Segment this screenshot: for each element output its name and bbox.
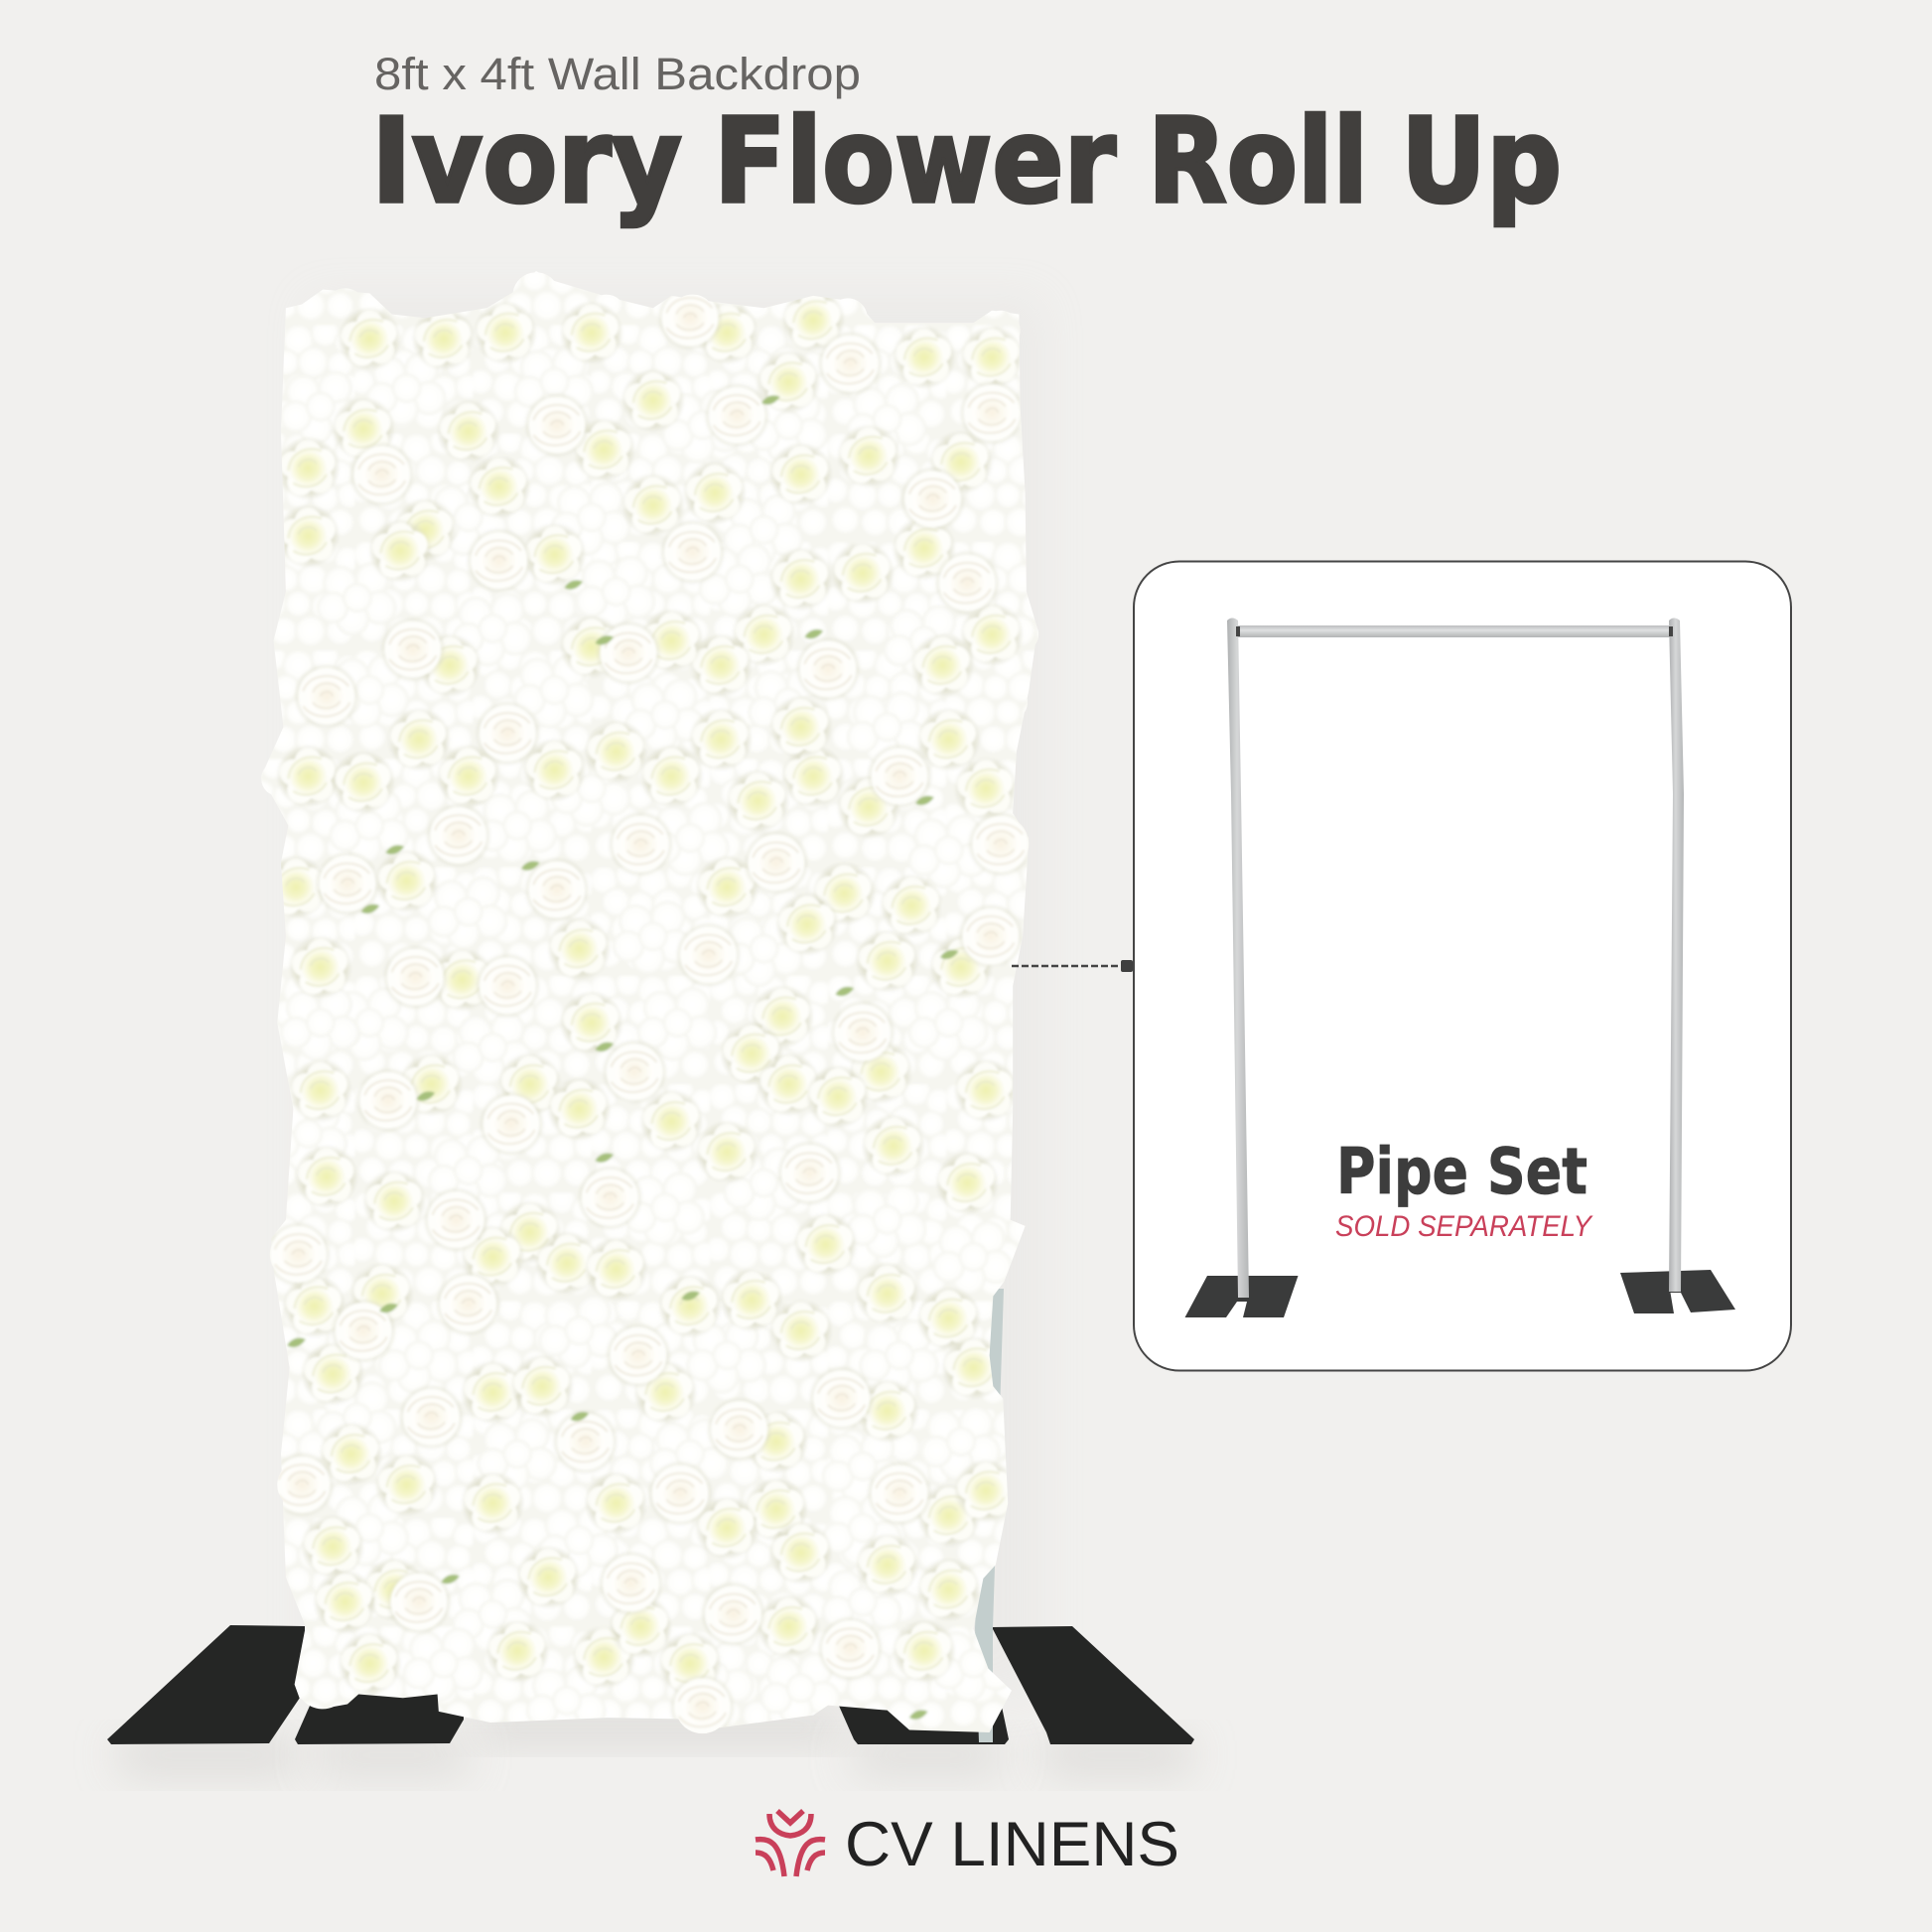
plate: far right bbox=[992, 1626, 1194, 1744]
plate: inner left bbox=[295, 1688, 464, 1744]
icon: pipe and base frame bbox=[1185, 618, 1735, 1317]
heading: title: Ivory bbox=[371, 92, 682, 229]
heading: title: Up bbox=[1401, 92, 1562, 229]
base plates bbox=[107, 1625, 1194, 1744]
heading: title: Flower bbox=[714, 92, 1116, 229]
heading: title: Roll bbox=[1148, 92, 1368, 229]
wordmark: CV LINENS bbox=[845, 1810, 1179, 1879]
support pole bbox=[975, 1289, 1004, 1742]
panel: pipe set bbox=[1134, 562, 1791, 1370]
heading: subtitle: 8ft x 4ft Wall Backdrop bbox=[374, 49, 861, 99]
label: Pipe Set: Pipe Set bbox=[1336, 1136, 1587, 1209]
icon: logo mark bbox=[756, 1811, 825, 1876]
label: sold separately: SOLD SEPARATELY bbox=[1335, 1210, 1593, 1243]
floor shadows bbox=[119, 298, 1191, 1773]
connector: dashed leader line bbox=[1012, 960, 1133, 972]
plate: inner right bbox=[831, 1688, 1009, 1744]
logo: CV Linens bbox=[756, 1810, 1179, 1879]
flower wall bbox=[246, 259, 1047, 1739]
plate: far left bbox=[107, 1625, 305, 1744]
